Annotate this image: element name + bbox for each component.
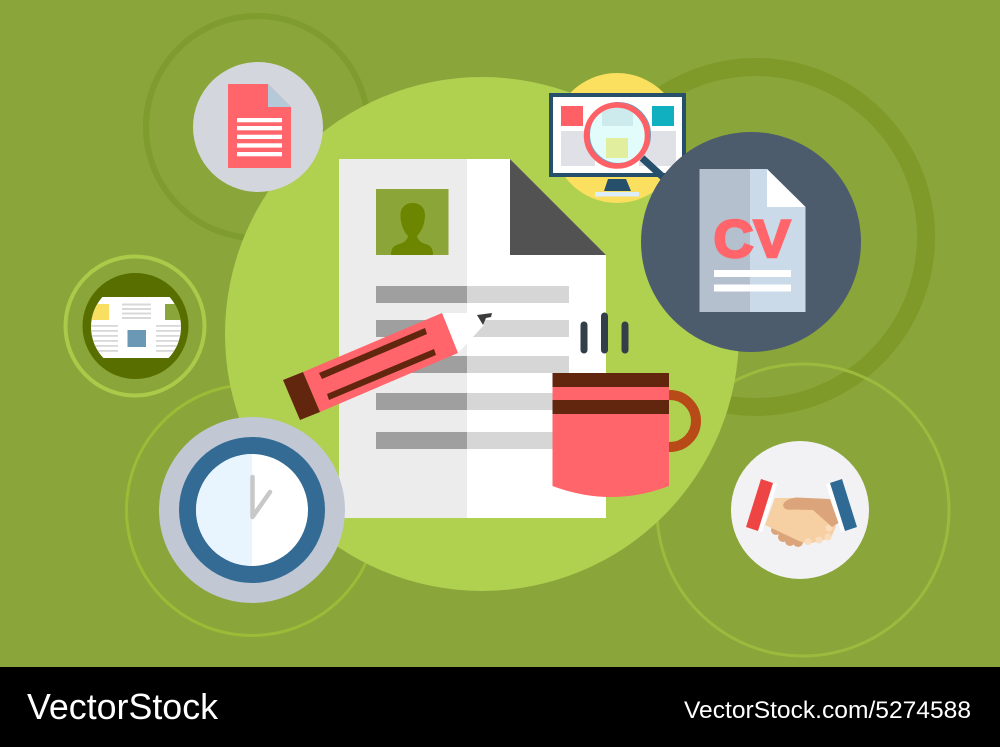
coffee mug [552, 373, 696, 497]
lighter hand [765, 498, 836, 544]
ring: bottom right [657, 364, 949, 656]
footer logo text: VectorStock [27, 686, 219, 727]
CV label: CV [714, 210, 790, 269]
icon: newspaper badge [66, 256, 204, 396]
steam [584, 316, 625, 350]
icon: handshake [731, 441, 869, 579]
upper darker hand and thumb [783, 498, 838, 527]
ring: bottom left [126, 384, 378, 636]
pencil [283, 313, 492, 420]
fingertips of the lighter hand [804, 524, 832, 545]
footer bar [0, 667, 1000, 747]
profile photo [376, 189, 448, 255]
monitor with magnifier [551, 73, 684, 203]
icon: CV badge [641, 132, 861, 352]
ring: right thick [586, 67, 926, 407]
lower fingers of the darker hand [771, 525, 806, 547]
text lines [376, 286, 569, 449]
icon: document badge [193, 62, 323, 192]
footer url text: VectorStock.com/5274588 [684, 697, 971, 724]
resume document [339, 159, 606, 518]
ring: top left [146, 16, 368, 238]
icon: clock [159, 417, 345, 603]
big central circle [225, 77, 739, 591]
